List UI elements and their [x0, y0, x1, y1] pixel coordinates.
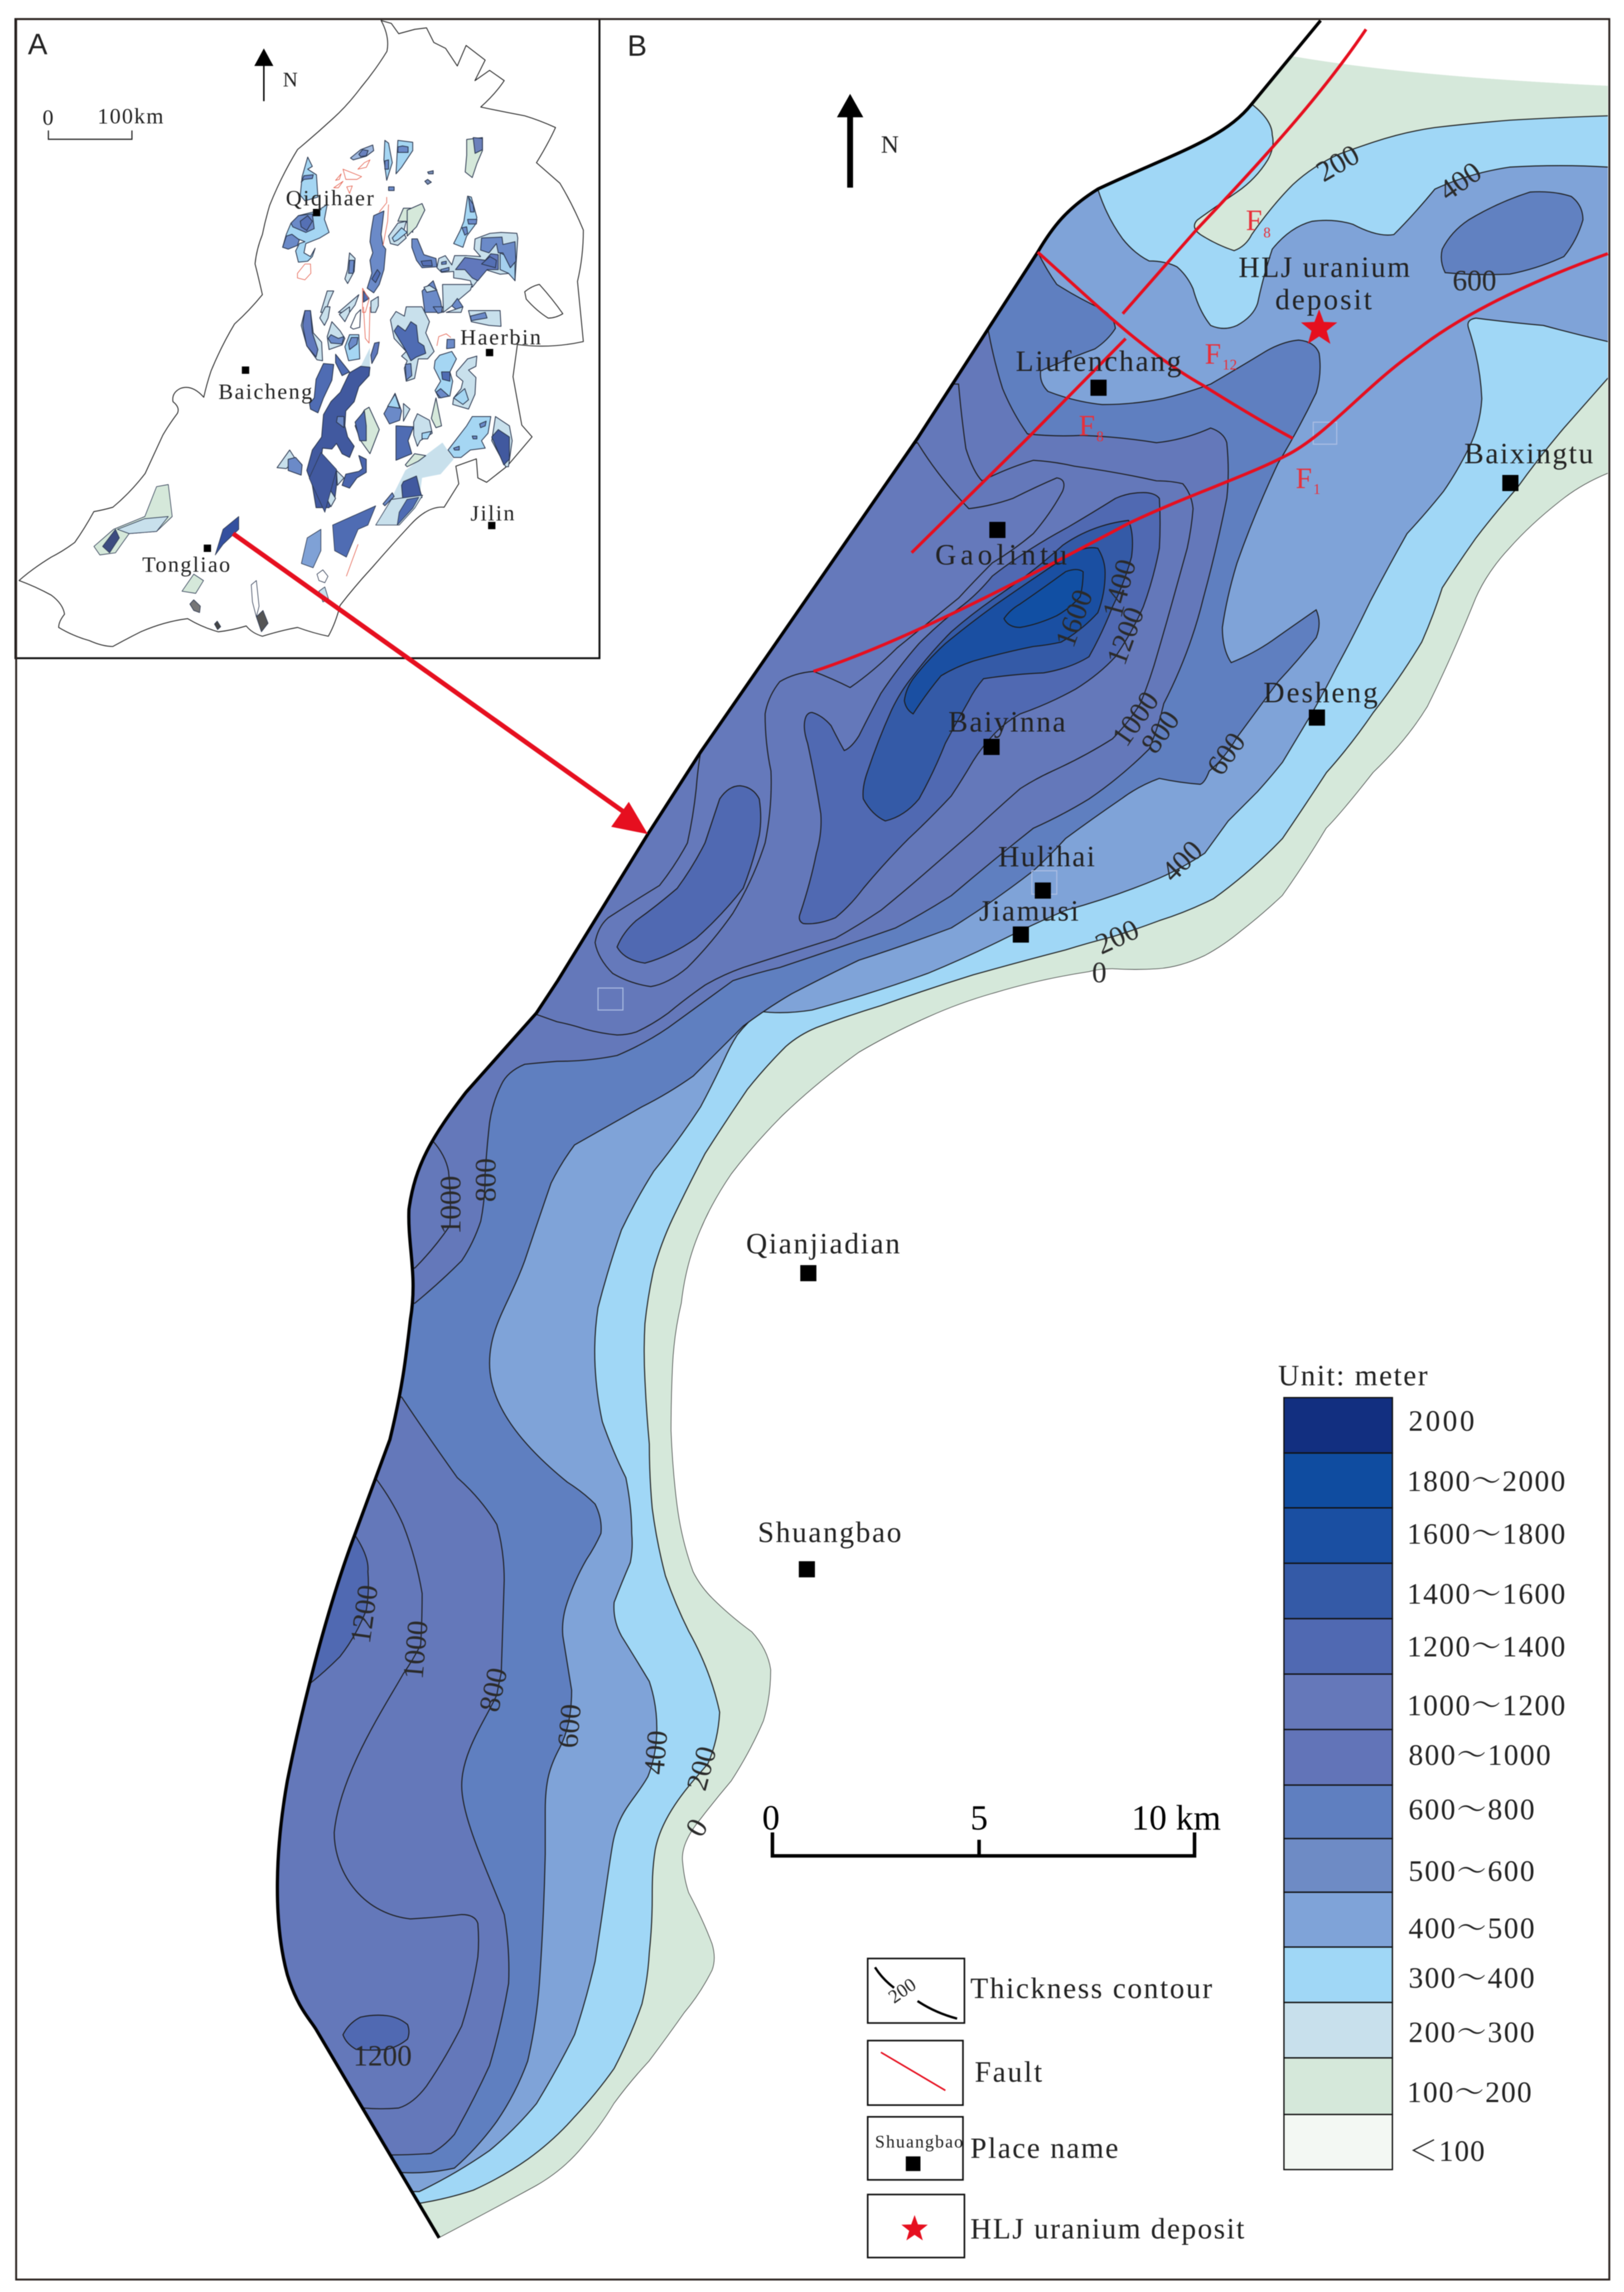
legend value labels: 200～300	[1409, 2016, 1535, 2049]
contour value labels: 200	[680, 1743, 723, 1794]
zone: 1600-1800 m core	[905, 548, 1105, 714]
zone: 400-600 m	[403, 165, 1608, 2193]
legend item: thickness contour: Thickness contour	[970, 1972, 1212, 2005]
scale bar B	[762, 1798, 1221, 1856]
zone: western finger 1000 m	[594, 442, 1065, 987]
legend item: place name: Place name	[970, 2132, 1118, 2165]
panel letter B: B	[627, 30, 647, 62]
label F1	[1296, 462, 1321, 498]
legend value labels: 500～600	[1409, 1855, 1535, 1888]
contour value labels: 600	[1201, 727, 1252, 781]
regional boundary outline	[19, 21, 583, 646]
label F8 north: F	[1246, 205, 1262, 237]
zone: 1200-1400 m core	[799, 493, 1160, 924]
place names A: Haerbin	[460, 325, 541, 350]
north-west basin patches (Qiqihaer area)	[283, 141, 413, 312]
legend value labels: 1400～1600	[1407, 1578, 1565, 1610]
legend value labels: 100～200	[1407, 2077, 1531, 2109]
place names: Liufenchang	[1016, 345, 1181, 378]
legend value labels: 1000～1200	[1407, 1690, 1565, 1722]
deposit label	[1239, 252, 1410, 316]
fault F8 north segment	[1123, 30, 1366, 313]
basin margin: thick boundary line	[277, 21, 1321, 2238]
contour value labels: 1200	[344, 1583, 384, 1646]
contour value labels: 600	[1452, 264, 1496, 297]
contour value labels: 400	[638, 1729, 674, 1775]
contour: 1000 m south	[334, 1478, 478, 2108]
contour value labels: 1200	[1100, 603, 1151, 669]
zone: western finger 1200 m	[617, 786, 761, 963]
zone: 800-1000 m north	[414, 330, 1229, 1304]
central and southern basin patches	[277, 307, 512, 508]
legend item: thickness contour	[868, 1958, 1212, 2023]
scale bar B: 0	[762, 1798, 780, 1837]
north arrow B: N	[881, 130, 899, 158]
label F8 south: F	[1079, 410, 1095, 442]
red outline near Haerbin	[364, 307, 451, 346]
contour value labels: 1000	[397, 1619, 434, 1681]
north arrow A: N	[283, 68, 298, 91]
scale bar A	[42, 104, 163, 139]
fault F1	[814, 254, 1608, 672]
legend value labels: 300～400	[1409, 1962, 1535, 1995]
contour value labels: 200	[1090, 913, 1144, 961]
zone: 1800-2000 m core	[1004, 570, 1083, 628]
place names: Baiyinna	[948, 706, 1066, 738]
place names: Shuangbao	[758, 1517, 901, 1549]
scale bar B: 10 km	[1132, 1798, 1221, 1837]
place names: Baixingtu	[1464, 437, 1593, 470]
place names: Jiamusi	[979, 895, 1079, 927]
label F8 north: 8	[1263, 225, 1271, 241]
contour value labels: 800	[1134, 705, 1186, 759]
fault F8 south segment	[912, 339, 1125, 553]
deposit label: HLJ uranium	[1239, 252, 1410, 284]
zone: small 1000 m at west margin	[220, 1141, 451, 1268]
place names A: Qiqihaer	[286, 186, 374, 210]
label F1: F	[1296, 462, 1312, 495]
red outlines of sub-basins (Qiqihaer area)	[297, 160, 389, 312]
legend value labels: 1600～1800	[1407, 1518, 1565, 1550]
place names	[746, 345, 1593, 1549]
legend item: thickness contour: 200	[885, 1974, 920, 2008]
legend value labels: 400～500	[1409, 1912, 1535, 1944]
place names A: Baicheng	[219, 379, 312, 404]
legend value labels	[1407, 1405, 1565, 2168]
zone: north-east 600+ patch	[1441, 192, 1583, 274]
contour value labels: 1400	[1096, 556, 1143, 621]
contour value labels: 1200	[353, 2040, 412, 2072]
zone: 0-200 m	[420, 56, 1608, 2237]
place names: Qianjiadian	[746, 1228, 900, 1260]
deposit label: deposit	[1275, 284, 1372, 316]
colour legend	[1278, 1360, 1565, 2170]
legend value labels: 1200～1400	[1407, 1631, 1565, 1663]
contour value labels: 400	[1433, 156, 1487, 207]
deposit star	[1301, 310, 1337, 344]
place names: Hulihai	[998, 841, 1095, 873]
zone: 800-1000 m south	[147, 1397, 509, 2155]
label F12: F	[1205, 338, 1221, 370]
scale bar B: 5	[970, 1798, 988, 1837]
legend title: Unit: meter	[1278, 1360, 1428, 1392]
label F12: 12	[1222, 356, 1237, 373]
legend value labels: 800～1000	[1409, 1739, 1551, 1772]
contour value labels: 800	[473, 1665, 514, 1715]
legend item: HLJ uranium deposit	[868, 2194, 1245, 2257]
contour value labels: 200	[1311, 138, 1365, 189]
legend item: HLJ uranium deposit: HLJ uranium deposit	[970, 2213, 1245, 2245]
north arrow A	[254, 49, 298, 101]
zone: 600-800 m	[393, 254, 1321, 2174]
place markers A	[204, 209, 495, 552]
locator arrow from panel A to panel B	[233, 534, 648, 834]
label F12	[1205, 338, 1237, 373]
contour value labels: 0	[1092, 957, 1106, 989]
fault F12	[1038, 252, 1293, 438]
contour value labels: 1600	[1049, 585, 1099, 652]
panel A frame	[16, 19, 600, 658]
legend value labels: 600～800	[1409, 1793, 1535, 1826]
place names: Desheng	[1263, 677, 1378, 709]
contour value labels: 1000	[434, 1176, 467, 1234]
legend item: fault: Fault	[975, 2056, 1042, 2088]
southern and western basin patches	[94, 452, 423, 632]
legend value labels: 1800～2000	[1407, 1465, 1565, 1498]
faint artefact rectangles	[598, 422, 1337, 1010]
symbol legend	[868, 1958, 1245, 2257]
contour value labels: 0	[679, 1813, 714, 1842]
zone: 1200 m south closed loop	[343, 2015, 409, 2050]
faults	[814, 30, 1608, 672]
zone: 200-400 m	[414, 104, 1608, 2204]
label F8 south: 8	[1096, 428, 1104, 445]
legend value labels: 2000	[1409, 1405, 1475, 1437]
north arrow B	[837, 94, 899, 187]
panel A: regional location map	[16, 19, 600, 658]
fault labels	[1079, 205, 1321, 498]
label F8 north	[1246, 205, 1271, 241]
panel letter A: A	[28, 28, 47, 61]
place names A	[142, 186, 541, 577]
place names A: Jilin	[471, 501, 515, 525]
north-east basin patches	[407, 138, 518, 312]
place names: Gaolintu	[935, 539, 1067, 571]
zone: 1000-1200 m north	[536, 383, 1195, 1036]
contour value labels: 800	[470, 1158, 502, 1202]
contour value labels: 1000	[1105, 686, 1166, 752]
legend item: place name	[868, 2117, 1118, 2180]
legend swatches	[1284, 1398, 1393, 2170]
place markers	[799, 380, 1519, 1577]
scale bar A: 0	[42, 105, 54, 129]
zone: 1200 m west margin	[220, 1535, 369, 1683]
contour value labels: 400	[1155, 834, 1209, 888]
scale bar A: 100km	[98, 104, 163, 128]
legend value labels: ＜100	[1409, 2135, 1485, 2168]
contour: 0 m	[439, 474, 1608, 2238]
legend item: place name: Shuangbao	[875, 2132, 963, 2151]
label F1: 1	[1313, 481, 1321, 498]
label F8 south	[1079, 410, 1104, 445]
place names A: Tongliao	[142, 552, 230, 577]
legend item: fault	[868, 2040, 1042, 2105]
zone: 1400-1600 m core	[863, 520, 1133, 821]
contour value labels: 600	[552, 1703, 588, 1749]
contour value labels	[344, 138, 1496, 2072]
